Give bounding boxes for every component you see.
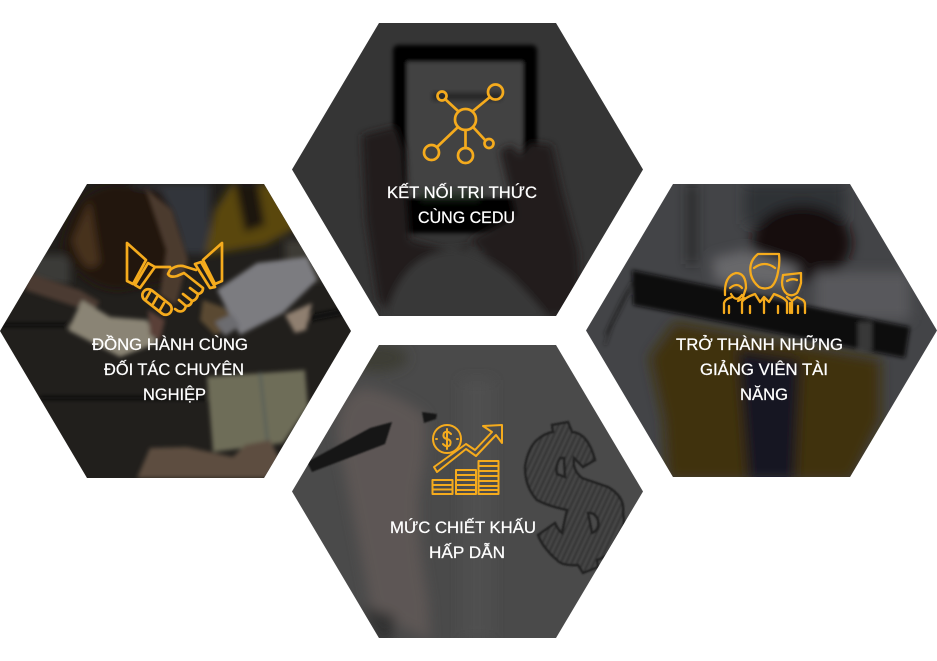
illustration: hatched dollar sign [525, 422, 624, 573]
text: kết nối tri thức cùng cedu: CÙNG CEDU [418, 208, 515, 227]
text: đồng hành cùng đối tác chuyên nghiệp: NGHIỆP [143, 385, 206, 404]
photo: hand drawing a dollar sign [290, 342, 645, 642]
text: đồng hành cùng đối tác chuyên nghiệp: ĐỒNG HÀNH CÙNG [92, 335, 248, 354]
icon: network [424, 84, 503, 163]
text: kết nối tri thức cùng cedu [387, 182, 537, 227]
text: mức chiết khấu hấp dẫn: HẤP DẪN [429, 543, 505, 562]
text: trở thành những giảng viên tài năng: NĂNG [740, 385, 788, 404]
text: mức chiết khấu hấp dẫn: MỨC CHIẾT KHẤU [390, 518, 536, 537]
text: kết nối tri thức cùng cedu: KẾT NỐI TRI THỨC [387, 182, 537, 202]
photo: people reading at wooden table [0, 180, 355, 480]
icon: coins and rising chart [432, 425, 502, 494]
photo: hands holding tablet [290, 20, 645, 320]
icon: group of people [724, 254, 805, 313]
text: mức chiết khấu hấp dẫn [390, 518, 536, 562]
panel: mức chiết khấu [290, 342, 645, 642]
text: trở thành những giảng viên tài năng: TRỞ THÀNH NHỮNG [676, 335, 843, 354]
text: trở thành những giảng viên tài năng: GIẢNG VIÊN TÀI [700, 360, 828, 379]
panel: đồng hành cùng đối tác [0, 180, 355, 480]
icon: handshake [127, 243, 222, 317]
text: đồng hành cùng đối tác chuyên nghiệp: ĐỐI TÁC CHUYÊN [104, 359, 244, 379]
photo: person holding a book [585, 180, 937, 480]
text: trở thành những giảng viên tài năng [676, 335, 843, 404]
panel: trở thành giảng viên [585, 180, 937, 480]
panel: kết nối tri thức [290, 20, 645, 320]
text: đồng hành cùng đối tác chuyên nghiệp [92, 335, 248, 404]
